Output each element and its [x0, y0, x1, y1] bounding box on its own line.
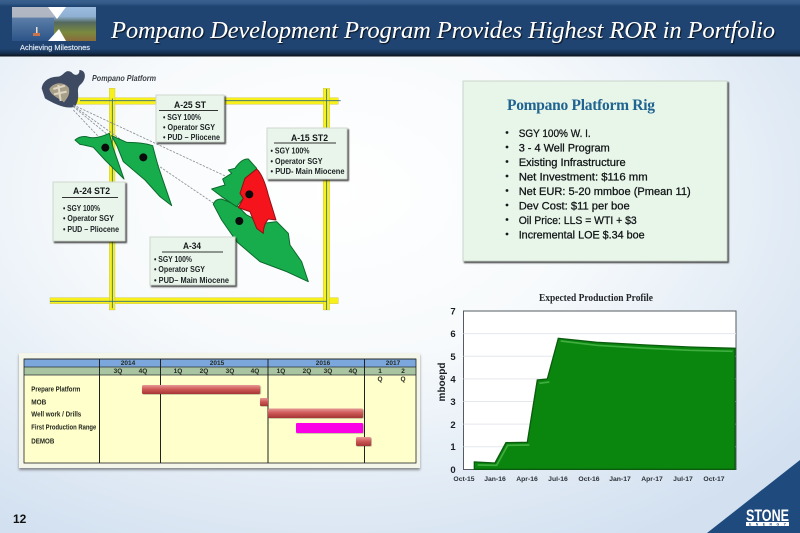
callout: A-24 ST2: A-24 ST2 — [73, 186, 110, 197]
header bar — [0, 0, 800, 56]
production area — [474, 338, 735, 469]
quarter labels: 2Q — [303, 368, 311, 375]
x axis labels: Oct-17 — [703, 476, 725, 483]
callout: A-15 ST2: • PUD- Main Miocene — [270, 167, 345, 176]
rig heading: Pompano Platform Rig — [507, 97, 655, 114]
callout: A-34: • PUD– Main Miocene — [154, 276, 230, 285]
y axis labels: 3 — [450, 397, 456, 408]
quarter labels: 1Q — [174, 368, 182, 375]
year labels — [121, 360, 401, 367]
map panel — [42, 70, 347, 310]
task labels: MOB — [31, 398, 46, 406]
year labels: 2017 — [386, 360, 401, 367]
callout: A-25 ST — [156, 95, 224, 142]
callout: A-15 ST2: • SGY 100% — [270, 146, 310, 156]
x axis labels — [453, 476, 725, 483]
year row — [24, 359, 416, 367]
quarter labels: 4Q — [349, 368, 357, 375]
y axis title: mboepd — [437, 363, 448, 401]
year labels: 2014 — [121, 360, 136, 367]
page number: 12 — [13, 512, 27, 526]
callout: A-25 ST: • Operator SGY — [163, 123, 216, 132]
quarter labels: 3Q — [114, 368, 122, 375]
quarter labels: 1Q — [277, 368, 285, 375]
platform icon — [42, 70, 85, 108]
quarter labels — [114, 368, 406, 383]
footer corner with logo — [707, 460, 800, 533]
quarter row — [24, 367, 416, 375]
gantt body — [24, 359, 416, 463]
callout: A-34: A-34 — [183, 241, 202, 252]
rig bullet list: 3 - 4 Well Program — [519, 142, 610, 154]
bar: MOB — [260, 398, 268, 406]
rig bullet list: Oil Price: LLS = WTI + $3 — [519, 215, 637, 227]
y axis labels: 1 — [450, 442, 456, 453]
rig bullet list: SGY 100% W. I. — [519, 128, 591, 140]
task labels: First Production Range — [31, 422, 96, 432]
quarter labels: 3Q — [324, 368, 332, 375]
callout: A-34 — [150, 237, 235, 285]
blue corner triangle — [707, 460, 800, 533]
callout: A-34: • Operator SGY — [154, 265, 206, 274]
reservoir: upper lobe — [212, 159, 257, 207]
callout: A-34: • SGY 100% — [154, 255, 192, 264]
task labels: DEMOB — [31, 436, 54, 446]
x axis labels: Apr-17 — [641, 476, 663, 483]
rig bullet list: Net Investment: $116 mm — [519, 171, 648, 183]
quarter labels: 2Q — [200, 368, 208, 375]
panel: Pompano Platform Rig — [463, 81, 727, 261]
plot area — [464, 311, 736, 470]
quarter labels: 1 — [378, 368, 382, 375]
reservoir: A-15 red — [238, 169, 276, 233]
quarter labels: 4Q — [251, 368, 259, 375]
well path lines — [73, 105, 238, 220]
x axis labels: Jul-16 — [548, 476, 568, 483]
rig bullet list: Incremental LOE $.34 boe — [519, 229, 645, 241]
x axis labels: Jul-17 — [673, 476, 693, 483]
gantt chart — [19, 353, 420, 468]
reservoir: A-24 — [75, 133, 124, 179]
logo: STONE Energy: ENERGY — [749, 522, 787, 526]
y axis labels: 5 — [450, 352, 456, 363]
y axis labels: 4 — [450, 374, 456, 386]
y axis labels: 2 — [450, 420, 456, 431]
yellow lease grid — [50, 88, 341, 310]
callout: A-24 ST2: • SGY 100% — [63, 204, 100, 213]
header photo — [12, 7, 96, 41]
quarter labels: 3Q — [226, 368, 234, 375]
year labels: 2016 — [316, 360, 331, 367]
y axis labels — [450, 306, 456, 476]
bar: Well work — [268, 408, 363, 418]
quarter labels: Q — [400, 376, 406, 383]
map graphics — [42, 70, 341, 310]
y axis labels: 6 — [450, 329, 456, 340]
x axis labels: Jan-17 — [609, 476, 631, 483]
task labels: Prepare Platform — [31, 384, 80, 394]
rig bullet list: Existing Infrastructure — [519, 157, 626, 169]
y axis labels: 0 — [450, 465, 456, 476]
quarter labels: 4Q — [139, 368, 147, 375]
quarter labels: Q — [377, 376, 383, 383]
x axis labels: Oct-15 — [453, 476, 475, 483]
rig bullet list: Dev Cost: $11 per boe — [519, 200, 630, 212]
callout: A-25 ST: • PUD – Pliocene — [163, 133, 221, 142]
reservoir: A-25 — [112, 136, 172, 206]
x axis labels: Jan-16 — [484, 476, 506, 483]
callout: A-25 ST: A-25 ST — [174, 100, 206, 111]
rig bullet list — [506, 128, 691, 241]
callout: A-15 ST2: A-15 ST2 — [291, 133, 328, 144]
reservoir: A-34 — [213, 199, 308, 282]
callout: A-15 ST2 — [267, 128, 347, 179]
quarter labels: 2 — [401, 368, 405, 375]
callout: A-24 ST2: • Operator SGY — [63, 214, 115, 223]
platform label: Pompano Platform — [92, 73, 156, 83]
callout: A-15 ST2: • Operator SGY — [270, 157, 323, 166]
task labels: Well work / Drills — [31, 410, 81, 418]
header banner — [0, 0, 800, 56]
chart: expected production profile — [437, 293, 736, 483]
title: Pompano Development Program Provides Highest ROR in Portfolio — [110, 17, 775, 44]
chart title: Expected Production Profile — [539, 293, 653, 304]
y axis labels: 7 — [450, 306, 456, 318]
bar: First Production Range — [296, 423, 363, 433]
tagline: Achieving Milestones — [20, 43, 90, 52]
well markers — [101, 144, 253, 225]
callout: A-24 ST2: • PUD – Pliocene — [63, 225, 120, 234]
bar: DEMOB — [356, 437, 371, 446]
rig bullet list: Net EUR: 5-20 mmboe (Pmean 11) — [519, 186, 691, 198]
rig panel box — [463, 81, 727, 261]
bar: Prepare Platform — [142, 385, 260, 394]
x axis labels: Apr-16 — [516, 476, 538, 483]
gantt backing — [19, 353, 420, 468]
year labels: 2015 — [210, 360, 225, 367]
callout: A-25 ST: • SGY 100% — [163, 113, 201, 122]
task labels — [31, 384, 96, 446]
callout: A-24 ST2 — [53, 182, 125, 241]
x axis labels: Oct-16 — [578, 476, 600, 483]
